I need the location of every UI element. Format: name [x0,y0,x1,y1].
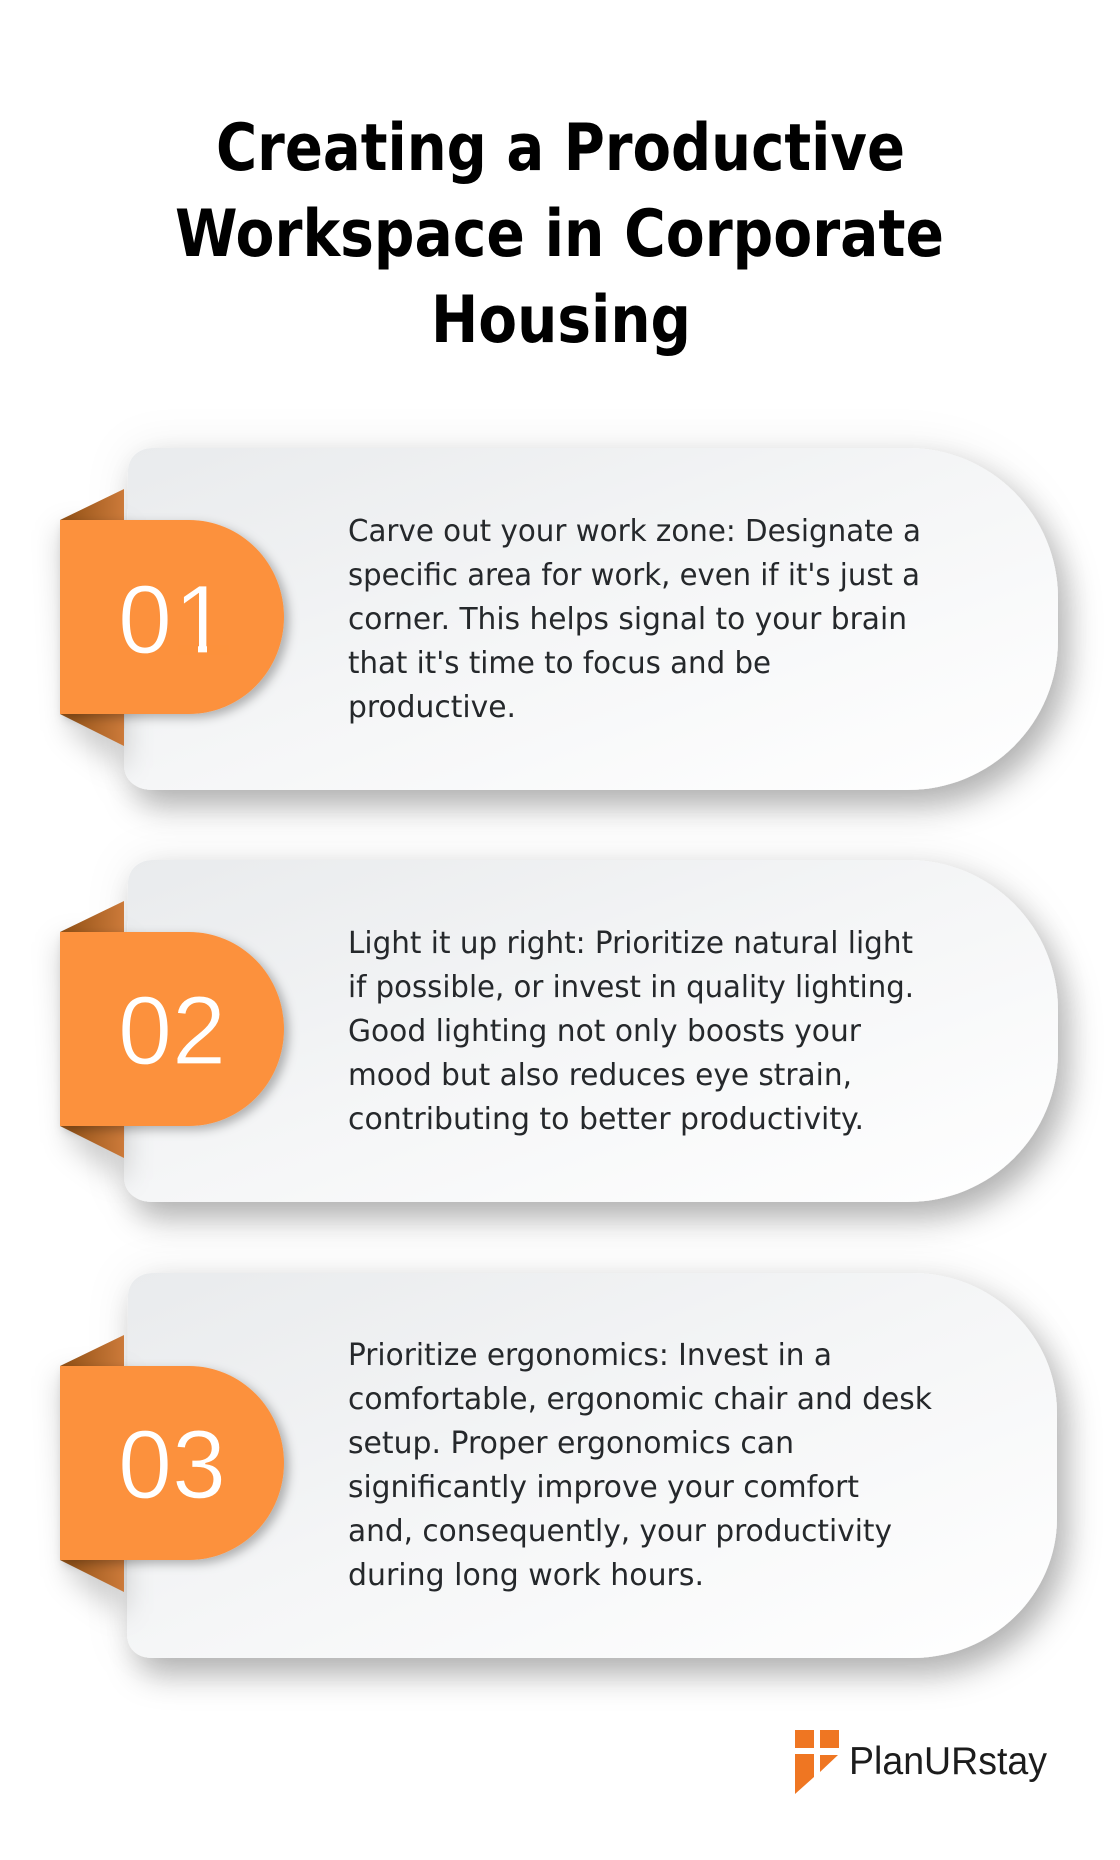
body text: setup. Proper ergonomics can [348,1426,794,1461]
body text: and, consequently, your productivity [348,1514,892,1549]
ribbon folds [60,489,124,746]
body text: corner. This helps signal to your brain [348,602,907,637]
body text: Light it up right: Prioritize natural light [348,926,913,961]
card background [124,860,1058,1202]
number: 0 [118,565,172,674]
number: 1 [174,565,228,674]
body text: Prioritize ergonomics: Invest in a [348,1338,832,1373]
title [175,111,944,358]
number: 02 [118,976,226,1085]
body text: during long work hours. [348,1558,704,1593]
title: Housing [431,283,691,358]
card background [127,1273,1057,1658]
number tab [60,1366,284,1560]
body text: mood but also reduces eye strain, [348,1058,852,1093]
number tab [60,520,284,714]
ribbon shadow [60,530,124,770]
body text: specific area for work, even if it's just a [348,558,920,593]
ribbon folds [60,1335,124,1592]
body text: Carve out your work zone: Designate a [348,514,921,549]
body text: contributing to better productivity. [348,1102,864,1137]
logo wordmark: PlanURstay [849,1740,1047,1783]
number: 03 [118,1410,226,1519]
body text [348,514,921,725]
logo: PlanURstay [795,1730,1047,1794]
ribbon folds [60,901,124,1158]
panel: step 02 [60,860,1058,1202]
body text [348,1338,933,1593]
panel: step 01 [60,448,1058,790]
ribbon shadow [60,1376,124,1616]
panel: step 03 [60,1273,1057,1658]
body text: significantly improve your comfort [348,1470,859,1505]
body text: comfortable, ergonomic chair and desk [348,1382,933,1417]
logo mark [795,1730,839,1794]
body text: if possible, or invest in quality lighting. [348,970,914,1005]
number [118,565,229,674]
body text: that it's time to focus and be [348,646,771,681]
number tab [60,932,284,1126]
title: Workspace in Corporate [175,197,944,272]
title: Creating a Productive [216,111,905,186]
card background [124,448,1058,790]
body text [348,926,914,1137]
ribbon shadow [60,942,124,1182]
body text: Good lighting not only boosts your [348,1014,862,1049]
body text: productive. [348,690,516,725]
